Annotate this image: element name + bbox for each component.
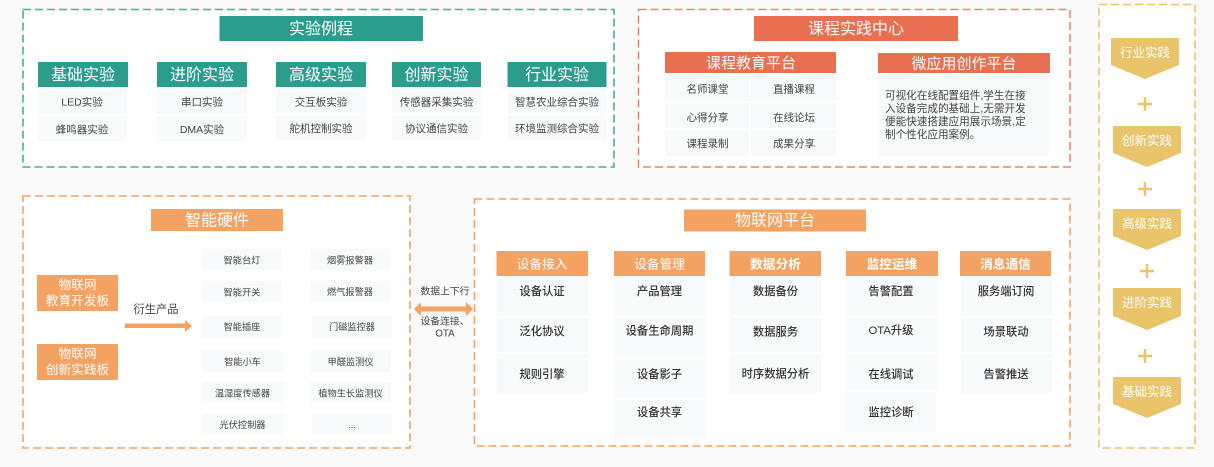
connector: 数据上下行: 设备连接、 [421, 314, 469, 328]
column: 进阶实验 [157, 62, 247, 141]
text block: 平台说明: 入设备完成的基础上,无需开发 [885, 102, 1026, 115]
step: 创新实践 [1113, 126, 1181, 167]
heading: 实验例程: 实验例程 [289, 20, 353, 38]
grid: 硬件产品: 甲醛监测仪 [328, 356, 373, 367]
board: 物联网创新实践板: 创新实践板 [46, 362, 110, 377]
column: 基础实验: 基础实验 [51, 66, 115, 84]
text block: 平台说明: 制个性化应用案例。 [885, 128, 980, 141]
grid: 硬件产品 [202, 249, 392, 435]
step: 创新实践: 创新实践 [1122, 133, 1172, 148]
heading: 实验例程 [220, 16, 423, 41]
sub-panel: 课程教育平台: 直播课程 [773, 82, 815, 96]
column: 数据分析: 数据备份 [753, 284, 799, 298]
step: 行业实践: 行业实践 [1120, 45, 1170, 60]
heading: 智能硬件 [151, 209, 283, 231]
step: 高级实践: 高级实践 [1122, 216, 1172, 231]
column: 监控运维: 监控诊断 [868, 405, 914, 419]
step: 基础实践: 基础实践 [1122, 384, 1172, 399]
sub-panel: 微应用创作平台: 微应用创作平台 [911, 54, 1017, 72]
panel: 物联网平台 [474, 199, 1070, 446]
sub-panel: 微应用创作平台 [878, 53, 1050, 156]
column: 监控运维: 在线调试 [868, 367, 914, 381]
column: 监控运维: OTA升级 [869, 323, 913, 337]
column: 设备管理 [614, 251, 705, 439]
column: 进阶实验: DMA实验 [180, 123, 225, 136]
step: 行业实践 [1111, 38, 1179, 79]
sub-panel: 课程教育平台 [665, 52, 836, 156]
icon: plus [1138, 349, 1152, 363]
step: 进阶实践: 进阶实践 [1122, 295, 1172, 310]
grid: 硬件产品: 智能台灯 [224, 254, 260, 266]
label: 衍生产品: 衍生产品 [133, 302, 179, 316]
column: 数据分析: 数据服务 [753, 324, 798, 338]
column: 创新实验: 传感器采集实验 [400, 96, 474, 108]
column: 创新实验: 协议通信实验 [405, 122, 468, 135]
column: 行业实验: 行业实验 [525, 66, 589, 84]
icon: plus [1138, 97, 1152, 111]
sub-panel: 课程教育平台: 名师课堂 [686, 82, 728, 96]
column: 设备接入: 设备认证 [519, 284, 565, 298]
column: 进阶实验: 进阶实验 [170, 66, 234, 84]
column: 设备管理: 产品管理 [637, 284, 682, 298]
column: 行业实验 [508, 62, 606, 140]
grid: 硬件产品: ... [348, 420, 356, 430]
text block: 平台说明: 可视化在线配置组件,学生在接 [885, 89, 1026, 102]
column: 设备管理: 设备影子 [637, 367, 682, 381]
text block: 平台说明 [885, 89, 1026, 141]
column: 监控运维: 监控运维 [867, 256, 918, 272]
grid: 硬件产品: 光伏控制器 [220, 419, 265, 430]
sub-panel: 课程教育平台: 课程教育平台 [706, 55, 796, 72]
step: 进阶实践 [1113, 288, 1181, 330]
connector: 数据上下行: 数据上下行 [421, 284, 470, 298]
column: 设备接入: 泛化协议 [519, 324, 565, 338]
grid: 硬件产品: 燃气报警器 [327, 286, 373, 297]
panel: 实验例程 [23, 10, 614, 167]
icon: plus [1138, 182, 1152, 196]
board: 物联网教育开发板: 物联网 [58, 278, 97, 292]
step: 基础实践 [1113, 377, 1181, 418]
column: 数据分析 [730, 251, 821, 393]
column: 基础实验: LED实验 [61, 96, 103, 108]
panel: 智能硬件 [23, 196, 410, 448]
column: 监控运维 [845, 251, 938, 432]
column: 设备管理: 设备生命周期 [626, 324, 693, 338]
column: 设备管理: 设备管理 [634, 258, 685, 272]
column: 高级实验: 舵机控制实验 [290, 122, 353, 135]
column: 高级实验: 交互板实验 [295, 96, 348, 108]
connector: 数据上下行: OTA [435, 328, 455, 340]
heading: 物联网平台 [684, 210, 866, 232]
board: 物联网教育开发板: 教育开发板 [46, 293, 110, 308]
column: 数据分析: 数据分析 [750, 256, 801, 272]
sub-panel: 课程教育平台: 心得分享 [686, 111, 728, 124]
step: 高级实践 [1113, 209, 1181, 250]
arrow: 衍生产品 [125, 320, 192, 332]
sub-panel: 课程教育平台: 成果分享 [773, 137, 815, 150]
heading: 课程实践中心: 课程实践中心 [808, 20, 904, 38]
column: 设备管理: 设备共享 [637, 405, 682, 419]
grid: 硬件产品: 植物生长监测仪 [318, 388, 383, 398]
column: 行业实验: 环境监测综合实验 [515, 122, 599, 135]
column: 基础实验 [38, 62, 128, 141]
text block: 平台说明: 便能快速搭建应用展示场景,定 [885, 115, 1026, 128]
grid: 硬件产品: 烟雾报警器 [327, 254, 373, 266]
heading: 物联网平台: 物联网平台 [735, 212, 815, 230]
panel: 课程实践中心 [638, 10, 1070, 167]
heading: 课程实践中心 [754, 16, 958, 41]
column: 基础实验: 蜂鸣器实验 [56, 123, 109, 136]
column: 监控运维: 告警配置 [868, 284, 914, 298]
column: 高级实验 [276, 62, 366, 140]
connector: 数据上下行 [414, 284, 473, 340]
grid: 硬件产品: 智能开关 [224, 286, 260, 298]
column: 设备接入: 设备接入 [517, 256, 568, 272]
column: 进阶实验: 串口实验 [181, 96, 223, 108]
board: 物联网创新实践板: 物联网 [58, 347, 97, 361]
column: 创新实验: 创新实验 [404, 66, 469, 84]
board: 物联网创新实践板 [37, 344, 118, 380]
grid: 硬件产品: 温湿度传感器 [215, 388, 270, 398]
grid: 硬件产品: 门磁监控器 [329, 321, 375, 332]
column: 消息通信 [960, 251, 1052, 393]
column: 消息通信: 场景联动 [983, 324, 1029, 338]
column: 设备接入: 规则引擎 [519, 367, 565, 381]
column: 高级实验: 高级实验 [289, 66, 353, 84]
board: 物联网教育开发板 [37, 275, 118, 311]
sub-panel: 课程教育平台: 在线论坛 [773, 111, 815, 124]
icon: plus [1140, 264, 1154, 278]
column: 行业实验: 智慧农业综合实验 [515, 96, 599, 108]
grid: 硬件产品: 智能插座 [224, 321, 260, 332]
column: 消息通信: 告警推送 [983, 367, 1029, 381]
column: 数据分析: 时序数据分析 [742, 366, 809, 380]
column: 消息通信: 消息通信 [980, 256, 1031, 272]
column: 设备接入 [496, 251, 588, 393]
heading: 智能硬件: 智能硬件 [185, 212, 249, 230]
panel: 实践路径 [1099, 4, 1195, 448]
column: 消息通信: 服务端订阅 [978, 284, 1034, 298]
column: 创新实验 [392, 62, 481, 140]
sub-panel: 课程教育平台: 课程录制 [686, 137, 728, 150]
grid: 硬件产品: 智能小车 [224, 356, 261, 367]
